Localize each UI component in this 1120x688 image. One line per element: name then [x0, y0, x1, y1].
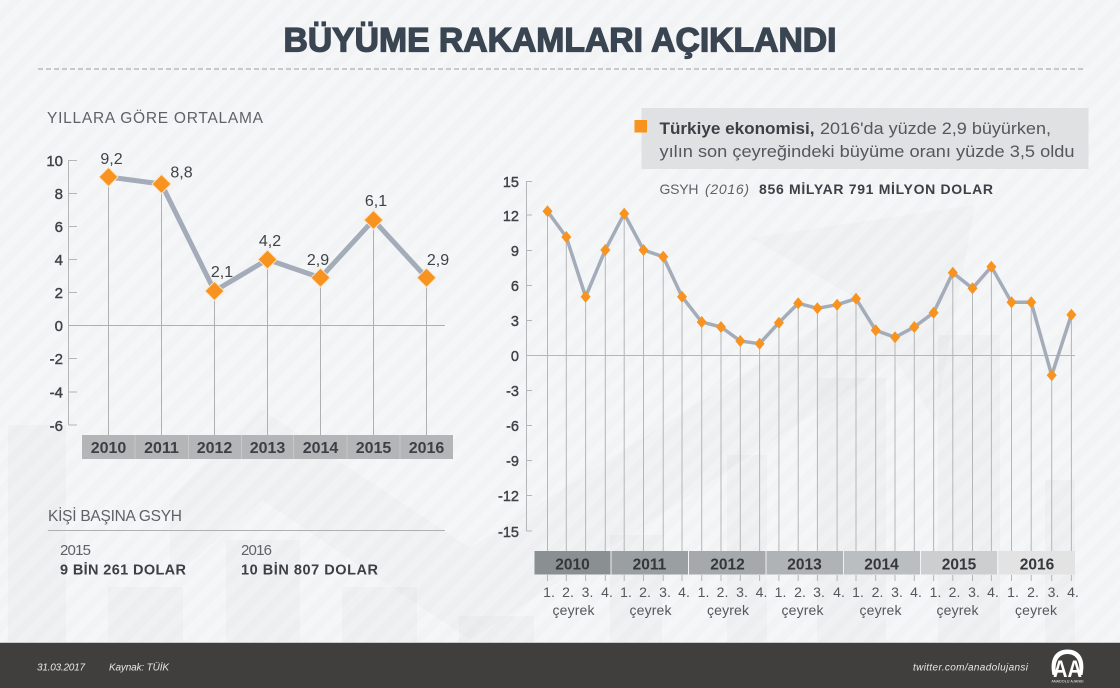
data markers [99, 168, 436, 300]
y axis: 12 [503, 209, 519, 225]
year axis bars: 2014 [864, 556, 899, 574]
icon: orange square bullet [634, 120, 647, 132]
footer bar [0, 642, 1120, 688]
year axis bar: 2016 [409, 440, 444, 457]
drop lines and zero line [68, 177, 445, 435]
footer source: Kaynak: TÜİK [109, 662, 170, 674]
data labels [100, 151, 449, 281]
title: BÜYÜME RAKAMLARI AÇIKLANDI [284, 22, 836, 60]
y axis: -3 [506, 384, 519, 400]
y axis: 3 [511, 314, 519, 330]
quarter labels: 3. [659, 584, 671, 600]
GDP 2016 note: 856 MİLYAR 791 MİLYON DOLAR [759, 181, 993, 197]
y axis: 2 [55, 285, 63, 302]
quarter labels: 4. [756, 584, 767, 600]
icon: Anadolu Agency logo [1052, 650, 1084, 684]
callout: Turkish economy: yılın son çeyreğindeki büyüme oranı yüzde 3,5 oldu [660, 143, 1074, 161]
year axis bars: 2013 [787, 556, 822, 574]
year axis bar [82, 435, 453, 459]
y axis: -2 [50, 351, 63, 368]
line series [548, 211, 1071, 375]
quarter labels: 2. [717, 584, 728, 600]
data labels: 8,8 [170, 164, 193, 182]
y axis: 4 [55, 252, 63, 269]
y axis: 9 [511, 244, 519, 260]
year axis bars: 2010 [555, 556, 590, 574]
quarter labels: çeyrek [707, 602, 750, 618]
panel: quarterly growth chart [498, 108, 1088, 618]
quarter labels: 3. [891, 584, 903, 600]
year axis bar: 2012 [197, 440, 232, 457]
quarter labels: 3. [968, 584, 980, 600]
quarter labels: 4. [833, 584, 845, 600]
y axis: 6 [511, 279, 519, 295]
quarter labels: 2. [794, 584, 806, 600]
year axis bars: 2011 [633, 556, 667, 574]
data labels: 2,9 [427, 252, 449, 269]
quarter labels: 2. [949, 584, 960, 600]
panel: yearly average chart [46, 109, 453, 459]
quarter labels: 3. [582, 584, 593, 600]
y axis: -6 [50, 418, 63, 435]
heading: GDP per capita: KİŞİ BAŞINA GSYH [48, 507, 182, 525]
GDP 2016 note: GSYH [660, 181, 698, 197]
stat: 2016 [241, 542, 379, 578]
y axis: 8 [55, 186, 63, 203]
quarter labels: 1. [1007, 584, 1019, 600]
quarter labels: 3. [813, 584, 825, 600]
callout: Turkish economy: 2016'da yüzde 2,9 büyürken, [820, 120, 1051, 138]
y axis: 6 [55, 219, 63, 236]
quarter labels: çeyrek [782, 602, 824, 618]
y axis: -12 [498, 489, 519, 505]
icon: Anadolu Agency logo: AA [1053, 656, 1082, 683]
y axis: -4 [50, 384, 63, 402]
y axis [498, 175, 532, 541]
quarter labels: çeyrek [936, 602, 980, 618]
data labels: 6,1 [365, 193, 387, 210]
stat: 2015 [60, 542, 187, 578]
callout: Turkish economy: Türkiye ekonomisi, [660, 120, 814, 138]
quarter labels: 1. [852, 584, 864, 600]
quarter labels: çeyrek [860, 602, 902, 618]
year axis bar: 2014 [303, 440, 338, 457]
data labels: 4,2 [259, 233, 281, 250]
quarter labels: 4. [678, 584, 690, 600]
year axis bar: 2011 [144, 440, 179, 457]
stat: 2016: 10 BİN 807 DOLAR [241, 562, 379, 578]
quarter labels: 3. [1048, 584, 1059, 600]
quarter labels: 2. [872, 584, 883, 600]
data labels: 9,2 [100, 151, 123, 168]
year axis bar: 2013 [250, 440, 285, 457]
year axis bars: 2016 [1020, 556, 1055, 574]
quarter labels: 2. [639, 584, 651, 600]
quarter labels: 1. [698, 584, 709, 600]
stat: 2015: 9 BİN 261 DOLAR [60, 562, 187, 578]
quarter labels: çeyrek [552, 602, 596, 618]
year axis bar: 2010 [91, 440, 126, 457]
y axis [46, 153, 77, 435]
quarter labels: 3. [736, 584, 748, 600]
heading: yearly average: YILLARA GÖRE ORTALAMA [47, 109, 264, 127]
quarter labels: 4. [601, 584, 613, 600]
quarter labels: 4. [910, 584, 922, 600]
line series [108, 177, 426, 291]
y axis: 10 [46, 153, 63, 170]
data labels: 2,9 [307, 252, 329, 269]
panel: GDP per capita [48, 507, 445, 578]
quarter labels: 1. [930, 584, 941, 600]
GDP 2016 note: (2016) [705, 181, 749, 197]
quarter labels: 4. [987, 584, 999, 600]
y axis: -15 [498, 525, 519, 541]
quarter labels [543, 584, 1079, 618]
y axis: 0 [511, 349, 519, 365]
footer twitter handle: twitter.com/anadolujansi [913, 662, 1029, 674]
quarter labels: çeyrek [1015, 602, 1058, 618]
stat: 2016: 2016 [241, 542, 272, 559]
quarter labels: 2. [1027, 584, 1039, 600]
y axis: -6 [506, 419, 519, 435]
year axis bars [534, 551, 1075, 574]
y axis: 15 [503, 175, 519, 191]
quarter labels: 2. [562, 584, 574, 600]
data markers [542, 205, 1076, 381]
year axis bars: 2012 [710, 556, 745, 574]
year axis bars: 2015 [942, 556, 977, 574]
stat: 2015: 2015 [60, 542, 91, 559]
quarter labels: 1. [543, 584, 555, 600]
quarter labels: 1. [775, 584, 786, 600]
year axis bar: 2015 [356, 440, 391, 457]
y axis: -9 [506, 454, 519, 470]
icon: Anadolu Agency logo: ANADOLU AJANSI [1052, 680, 1084, 684]
quarter labels: 1. [620, 584, 632, 600]
data labels: 2,1 [211, 264, 233, 281]
footer date: 31.03.2017 [37, 662, 85, 674]
quarter drop lines and zero line [526, 211, 1075, 581]
callout: Turkish economy [634, 108, 1088, 169]
quarter labels: 4. [1067, 584, 1079, 600]
quarter labels: çeyrek [630, 602, 672, 618]
y axis: 0 [55, 318, 63, 335]
